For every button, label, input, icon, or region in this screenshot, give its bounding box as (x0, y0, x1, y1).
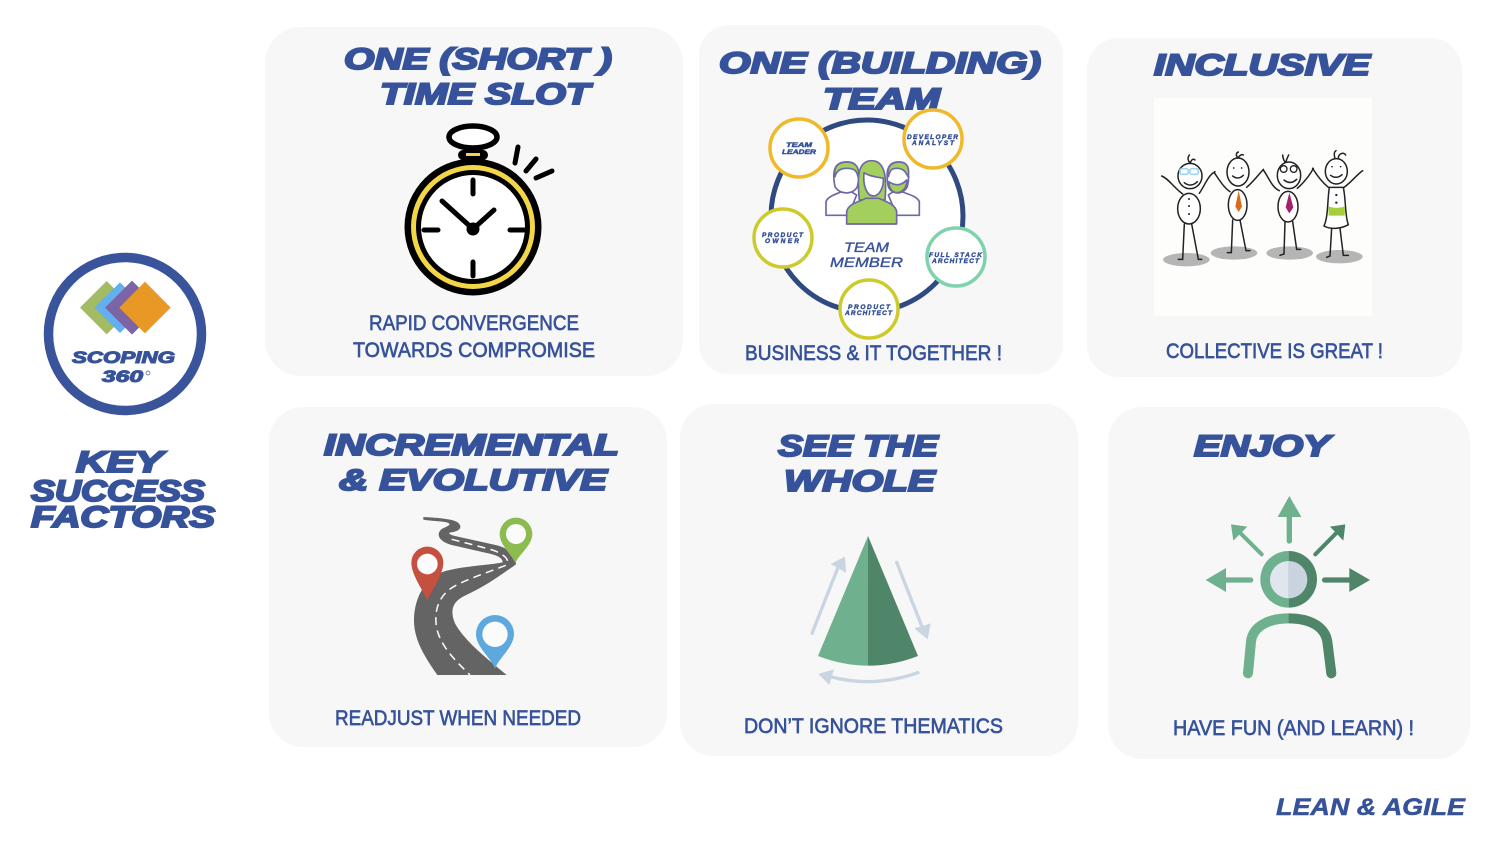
logo: Scoping 360: 360 (102, 367, 144, 386)
role: team leader: TEAM (786, 142, 813, 149)
panel: enjoy (1108, 407, 1470, 759)
caption: business and it together: BUSINESS & IT TOGETHER ! (745, 342, 1002, 365)
caption: rapid convergence: RAPID CONVERGENCE (369, 312, 579, 335)
icon: winding road with map pins (411, 517, 532, 675)
role: full stack architect: ARCHITECT (931, 258, 980, 265)
footer: lean and agile: LEAN & AGILE (1276, 794, 1466, 821)
title: incremental and evolutive (324, 429, 619, 497)
caption: collective is great: COLLECTIVE IS GREAT ! (1166, 340, 1383, 363)
caption: readjust when needed: READJUST WHEN NEEDED (335, 707, 581, 730)
panel: one short time slot (265, 27, 683, 376)
logo: Scoping 360: SCOPING (72, 348, 175, 367)
title: one short time slot (344, 43, 612, 111)
panel: one building team (699, 25, 1063, 374)
role: product architect: ARCHITECT (844, 310, 893, 317)
label: team member: MEMBER (830, 254, 903, 270)
panel: see the whole (680, 404, 1078, 756)
role: developer analyst (904, 110, 962, 168)
title: one short time slot: ONE (SHORT ) (344, 43, 612, 76)
title: enjoy: ENJOY (1194, 430, 1334, 463)
role: developer analyst: DEVELOPER (907, 134, 958, 141)
heading: key success factors: SUCCESS (31, 475, 205, 508)
heading: key success factors: KEY (76, 446, 167, 479)
title: one building team: TEAM (823, 83, 941, 116)
title: see the whole: WHOLE (784, 465, 936, 498)
role: team leader: LEADER (782, 149, 816, 156)
title: see the whole: SEE THE (778, 430, 939, 463)
role: product owner: OWNER (765, 238, 799, 245)
role: developer analyst: ANALYST (911, 140, 955, 147)
title: one building team: ONE (BUILDING) (719, 47, 1041, 80)
label: team member: TEAM (844, 239, 889, 255)
illustration: four stick figures holding hands (1154, 98, 1372, 316)
caption: have fun and learn: HAVE FUN (AND LEARN) ! (1173, 717, 1414, 740)
panel: incremental and evolutive (269, 407, 667, 747)
panel: inclusive (1087, 38, 1462, 377)
role: product architect (840, 280, 898, 338)
title: incremental and evolutive: & EVOLUTIVE (339, 464, 608, 497)
title: see the whole (778, 430, 939, 498)
heading: key success factors: FACTORS (31, 501, 215, 534)
icon: cone with rotation arrows (812, 536, 931, 685)
title: incremental and evolutive: INCREMENTAL (324, 429, 619, 462)
icon: stopwatch (404, 126, 552, 296)
heading: key success factors (31, 446, 215, 534)
title: one short time slot: TIME SLOT (380, 78, 593, 111)
role: product architect: PRODUCT (848, 304, 891, 311)
role: full stack architect (927, 228, 985, 286)
logo: Scoping 360 (48, 258, 202, 410)
caption: do not ignore thematics: DON’T IGNORE THEMATICS (744, 715, 1003, 738)
role: full stack architect: FULL STACK (929, 252, 983, 259)
team ring (771, 120, 963, 312)
icon: team members (826, 161, 919, 224)
icon: person with outward arrows (1206, 496, 1370, 678)
role: product owner: PRODUCT (762, 232, 804, 239)
role: product owner (754, 209, 812, 267)
role: team leader (770, 119, 828, 177)
title: one building team (719, 47, 1041, 116)
title: inclusive: INCLUSIVE (1154, 49, 1371, 82)
caption: rapid convergence: TOWARDS COMPROMISE (353, 339, 595, 362)
caption: rapid convergence (353, 312, 595, 362)
label: team member (830, 239, 903, 270)
